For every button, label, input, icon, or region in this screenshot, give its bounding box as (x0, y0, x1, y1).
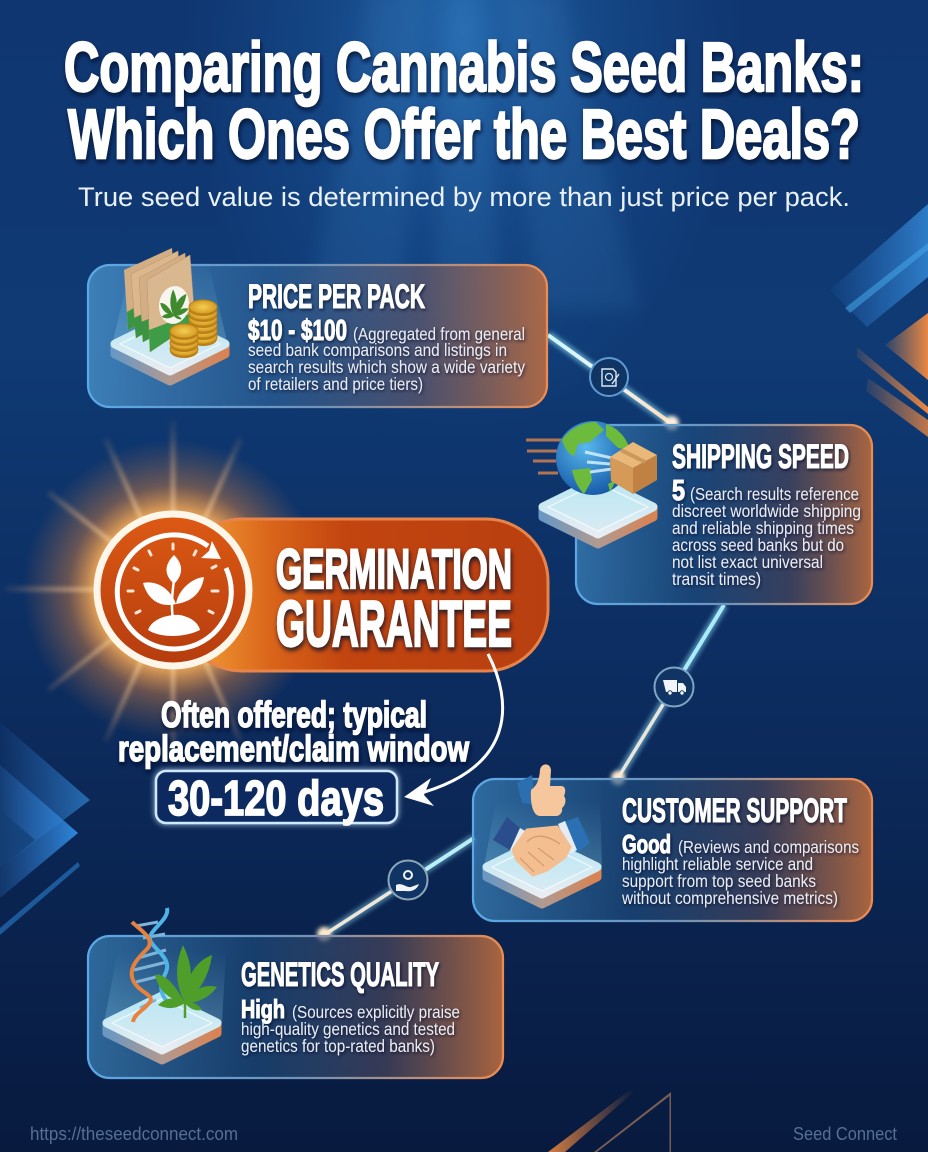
icon: discount tag (590, 358, 628, 396)
heading: germination guarantee: GERMINATION (276, 537, 512, 600)
decoration: top right shapes (830, 204, 928, 437)
panel: shipping speed (526, 421, 872, 604)
text: shipping speed detail: (Search results reference (690, 484, 859, 504)
banner pill (180, 519, 548, 671)
text: genetics quality detail: genetics for top-rated banks) (241, 1036, 435, 1056)
icon: hand with gear (388, 860, 428, 900)
text: customer support detail: highlight reliable service and (622, 854, 813, 874)
text: often offered: replacement/claim window (118, 728, 470, 769)
panel: germination guarantee (5, 420, 548, 760)
text: price per pack detail: seed bank comparisons and listings in (248, 340, 507, 360)
text: shipping speed detail: 5 (672, 475, 685, 507)
text: shipping speed detail (672, 475, 861, 589)
text: shipping speed detail: not list exact universal (672, 552, 823, 572)
heading: germination guarantee: GUARANTEE (276, 587, 512, 660)
text: shipping speed detail: transit times) (672, 569, 761, 589)
icon: handshake and thumbs up (484, 764, 602, 904)
text: price per pack detail: search results which show a wide variety (248, 357, 525, 377)
decoration: bottom orange lines (548, 1090, 671, 1152)
text: customer support detail: (Reviews and comparisons (678, 837, 859, 857)
panel: price per pack (88, 248, 547, 407)
connector: support to genetics (317, 838, 474, 941)
connector: shipping to support (611, 605, 724, 785)
text: customer support detail: without comprehensive metrics) (621, 888, 838, 908)
text: shipping speed detail: across seed banks but do (672, 535, 844, 555)
icon: globe and parcel (526, 421, 657, 544)
footer: url: https://theseedconnect.com (30, 1124, 238, 1144)
text: price per pack detail (248, 315, 525, 394)
sunburst glow (5, 420, 323, 760)
panel: customer support (473, 764, 872, 921)
text: often offered (118, 694, 470, 769)
decoration: left chevrons (0, 722, 90, 935)
text: customer support detail (621, 829, 859, 908)
heading: genetics quality: GENETICS QUALITY (241, 956, 439, 994)
text: price per pack detail: $10 - $100 (248, 315, 347, 347)
text: genetics quality detail: High (241, 994, 285, 1024)
text: shipping speed detail: discreet worldwide shipping (672, 501, 861, 521)
text: genetics quality detail: high-quality genetics and tested (241, 1019, 455, 1039)
text: price per pack detail: of retailers and price tiers) (248, 374, 423, 394)
title (64, 28, 864, 173)
callout: claim window (118, 654, 503, 826)
panel: genetics quality (88, 908, 503, 1078)
text: customer support detail: Good (622, 829, 671, 859)
icon: DNA helix and leaf (104, 908, 226, 1060)
text: genetics quality detail (241, 994, 460, 1056)
text: genetics quality detail: (Sources explicitly praise (292, 1002, 460, 1022)
text: shipping speed detail: and reliable shipping times (672, 518, 854, 538)
text: often offered: Often offered; typical (161, 694, 427, 735)
icon: sprout timer badge (97, 514, 249, 666)
subtitle: True seed value is determined by more than just price per pack. (78, 182, 850, 212)
value box: 30-120 days: 30-120 days (168, 772, 384, 826)
heading: price per pack: PRICE PER PACK (248, 278, 425, 316)
text: customer support detail: support from top seed banks (622, 871, 816, 891)
footer: brand: Seed Connect (793, 1124, 897, 1144)
heading: germination guarantee (276, 537, 512, 660)
arrow: to claim window (404, 654, 503, 806)
icon: truck (654, 668, 694, 706)
icon: seed packs and coins (112, 248, 228, 381)
text: price per pack detail: (Aggregated from general (353, 324, 525, 344)
connector: price to shipping (548, 335, 679, 430)
